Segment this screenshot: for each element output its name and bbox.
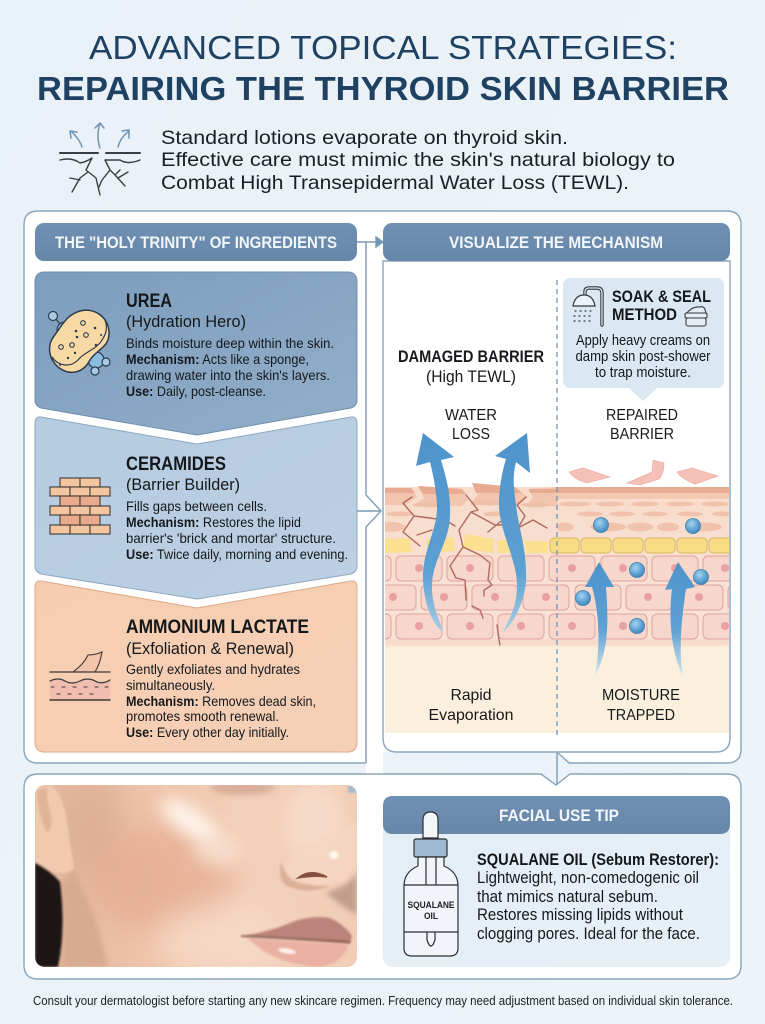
connector arrows <box>357 237 557 785</box>
text: ammonium lactate: Mechanism: Removes dead skin, <box>126 693 316 709</box>
text: squalane oil: that mimics natural sebum. <box>477 888 658 906</box>
card: ammonium lactate <box>35 581 357 752</box>
labels: damaged barrier: (High TEWL) <box>426 368 516 386</box>
heading: visualize the mechanism: VISUALIZE THE MECHANISM <box>449 234 663 252</box>
text: ceramides: Use: Twice daily, morning and evening. <box>126 546 348 562</box>
water droplets <box>576 518 708 634</box>
text: squalane oil: Lightweight, non-comedogenic oil <box>477 869 699 887</box>
ear <box>35 785 74 873</box>
text: soak and seal <box>576 287 711 381</box>
heading: visualize the mechanism <box>383 223 730 261</box>
nose <box>286 827 356 886</box>
text: ceramides: Mechanism: Restores the lipid <box>126 514 301 530</box>
text: urea: Binds moisture deep within the skin. <box>126 335 334 351</box>
text: squalane oil <box>477 851 719 943</box>
icon: cracked skin with evaporating water <box>60 123 140 195</box>
divider dashed line <box>556 280 558 735</box>
lipid layer <box>385 534 739 553</box>
text: soak and seal: SOAK & SEAL <box>612 287 711 306</box>
lips <box>241 917 352 944</box>
text: urea <box>126 291 334 399</box>
labels: repaired barrier: REPAIRED <box>606 407 678 424</box>
heading: facial use tip: FACIAL USE TIP <box>499 806 619 825</box>
text: soak and seal: Apply heavy creams on <box>576 333 710 349</box>
heading: holy trinity: THE "HOLY TRINITY" OF INGREDIENTS <box>55 234 337 252</box>
text: squalane oil: clogging pores. Ideal for the face. <box>477 925 700 943</box>
cracks <box>403 495 547 645</box>
text: ceramides: CERAMIDES <box>126 454 226 475</box>
panel: facial use tip <box>383 796 730 967</box>
text: ammonium lactate: Use: Every other day initially. <box>126 724 289 740</box>
icon: squalane bottle: SQUALANE <box>408 900 454 911</box>
icon: cream jar <box>685 307 707 326</box>
panel: bottom frame <box>24 774 741 979</box>
icon: brick wall <box>50 478 110 534</box>
text: squalane oil: SQUALANE OIL (Sebum Restorer): <box>477 851 719 869</box>
text: urea: (Hydration Hero) <box>126 312 246 331</box>
arrows: moisture trapped <box>585 562 695 676</box>
text: ceramides: (Barrier Builder) <box>126 475 240 494</box>
icon: sponge <box>48 310 110 375</box>
labels: damaged barrier: Rapid <box>450 687 492 704</box>
photo: glowing facial skin <box>35 775 357 975</box>
text: soak and seal: to trap moisture. <box>595 365 691 381</box>
surface layer, jagged on the damaged side <box>385 483 557 506</box>
labels: damaged barrier: LOSS <box>452 426 490 443</box>
panel: main frame <box>24 211 741 774</box>
card: urea <box>35 272 357 435</box>
text: ammonium lactate: simultaneously. <box>126 677 215 693</box>
intro text: Effective care must mimic the skin's natural biology to <box>161 149 675 171</box>
jaw shadow <box>60 870 108 967</box>
arrows: water loss <box>416 433 530 632</box>
text: ceramides <box>126 454 348 562</box>
intro text: Standard lotions evaporate on thyroid skin. <box>161 127 568 149</box>
title <box>37 29 729 107</box>
text: soak and seal: damp skin post-shower <box>576 349 711 365</box>
labels: repaired barrier <box>602 407 680 724</box>
icon: squalane bottle: OIL <box>424 911 438 922</box>
text: ammonium lactate: promotes smooth renewal. <box>126 708 279 724</box>
text: urea: drawing water into the skin's layers. <box>126 367 330 383</box>
text: soak and seal: METHOD <box>612 305 677 324</box>
card: ceramides <box>35 417 357 599</box>
labels: repaired barrier: TRAPPED <box>607 707 675 724</box>
labels: damaged barrier: Evaporation <box>428 707 514 724</box>
hair <box>35 863 63 967</box>
text: ammonium lactate: Gently exfoliates and hydrates <box>126 661 300 677</box>
text: ammonium lactate: AMMONIUM LACTATE <box>126 617 309 638</box>
skin cross-section <box>385 483 729 733</box>
text: urea: Mechanism: Acts like a sponge, <box>126 351 309 367</box>
text: squalane oil: Restores missing lipids without <box>477 906 683 924</box>
text: urea: Use: Daily, post-cleanse. <box>126 383 266 399</box>
labels: damaged barrier: WATER <box>445 407 497 424</box>
heading: holy trinity <box>35 223 357 261</box>
text: ammonium lactate <box>126 617 316 740</box>
icon: squalane bottle <box>404 812 458 956</box>
callout: soak and seal <box>563 278 724 401</box>
text: ammonium lactate: (Exfoliation & Renewal) <box>126 639 294 658</box>
labels: damaged barrier <box>398 347 544 724</box>
text: urea: UREA <box>126 291 172 312</box>
labels: damaged barrier: DAMAGED BARRIER <box>398 347 544 366</box>
intro text: Combat High Transepidermal Water Loss (TEWL). <box>161 172 629 194</box>
heading: facial use tip <box>383 796 730 834</box>
intro text <box>161 127 675 194</box>
cells <box>385 556 729 640</box>
panel: mechanism <box>382 223 731 753</box>
labels: repaired barrier: BARRIER <box>610 426 674 443</box>
labels: repaired barrier: MOISTURE <box>602 687 680 704</box>
title: REPAIRING THE THYROID SKIN BARRIER <box>37 70 729 107</box>
text: ceramides: barrier's 'brick and mortar' structure. <box>126 530 336 546</box>
text: ceramides: Fills gaps between cells. <box>126 498 267 514</box>
title: ADVANCED TOPICAL STRATEGIES: <box>89 29 677 66</box>
icon: shower <box>573 288 602 325</box>
icon: exfoliating skin <box>50 652 110 700</box>
repaired barrier flakes <box>569 460 718 485</box>
